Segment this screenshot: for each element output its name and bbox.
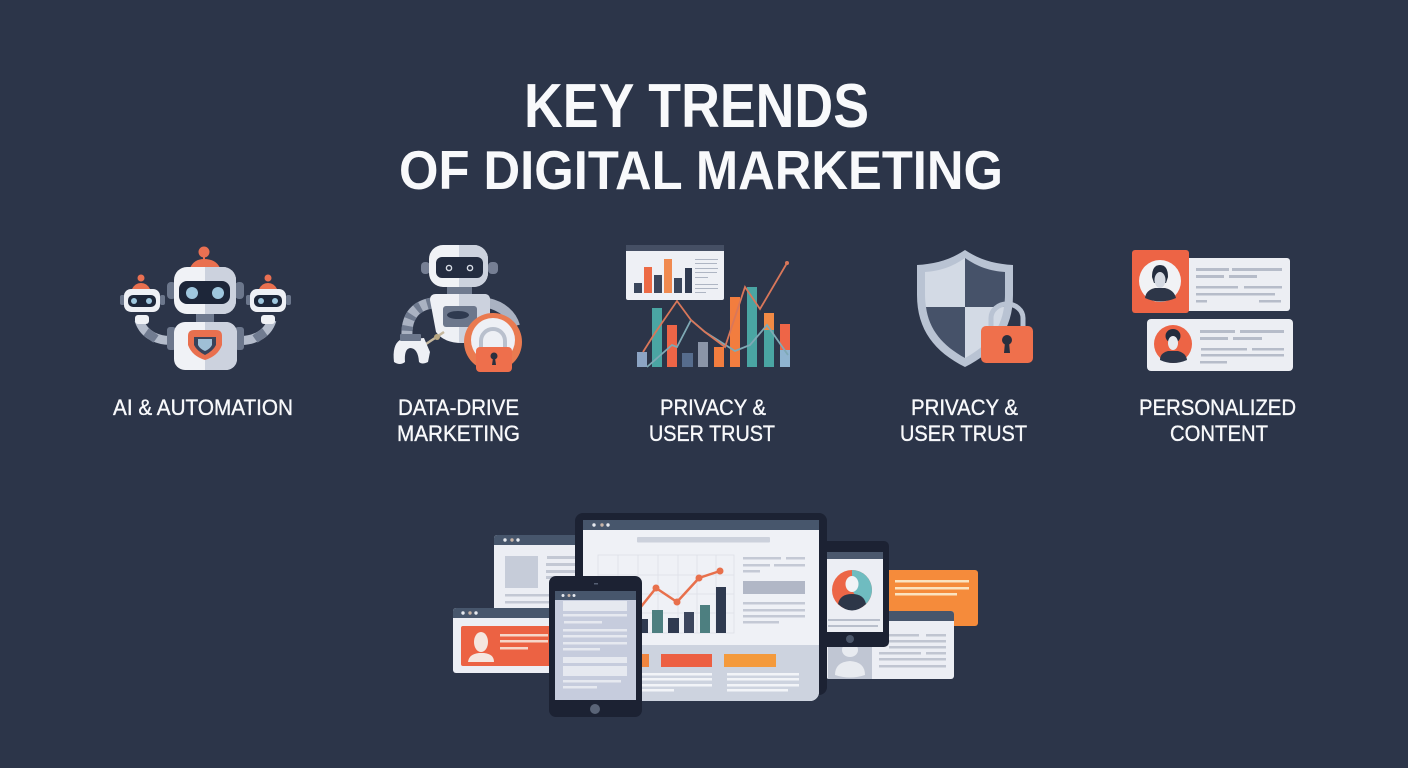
small tablet [820, 541, 889, 647]
dashboard window [626, 245, 724, 300]
back browser window [494, 535, 584, 611]
padlock [981, 304, 1033, 363]
icon: data robot with lock [394, 245, 522, 372]
label: Personalized Content: PERSONALIZED [1139, 395, 1296, 420]
title: OF DIGITAL MARKETING [399, 139, 1003, 201]
right helper robot [246, 274, 291, 312]
icon: shield with padlock [917, 250, 1033, 367]
profile card 1 [1132, 250, 1290, 313]
title [399, 72, 1003, 201]
label: Privacy & User Trust (second): PRIVACY & [911, 395, 1018, 420]
label: AI & Automation: AI & AUTOMATION [113, 395, 293, 420]
bar chart [637, 287, 790, 367]
device cluster illustration [453, 513, 978, 717]
line and bar chart [598, 555, 734, 633]
action buttons [630, 654, 776, 667]
front tablet [549, 576, 642, 717]
label: Privacy & User Trust: PRIVACY & [660, 395, 766, 420]
orange card [885, 570, 978, 626]
main robot [167, 246, 244, 370]
right browser window [826, 611, 954, 679]
label: Privacy & User Trust (second) [900, 395, 1027, 446]
side text block [743, 557, 805, 624]
left helper robot [120, 274, 165, 312]
label: Data-Drive Marketing: MARKETING [397, 421, 520, 446]
label: Personalized Content: CONTENT [1170, 421, 1268, 446]
main monitor [575, 513, 827, 701]
label: Privacy & User Trust [649, 395, 775, 446]
icon: personalized content cards [1132, 250, 1293, 371]
profile browser window [453, 608, 553, 673]
label: Personalized Content [1139, 395, 1296, 446]
label: Privacy & User Trust: USER TRUST [649, 421, 775, 446]
label: Data-Drive Marketing: DATA-DRIVE [398, 395, 519, 420]
trend lines [647, 320, 788, 367]
label: Data-Drive Marketing [397, 395, 520, 446]
profile card 2 [1147, 319, 1293, 371]
arms [139, 320, 272, 340]
label: Privacy & User Trust (second): USER TRUST [900, 421, 1027, 446]
icon: analytics chart [626, 245, 790, 367]
title: KEY TRENDS [524, 72, 869, 141]
icon: AI robots [120, 246, 291, 370]
